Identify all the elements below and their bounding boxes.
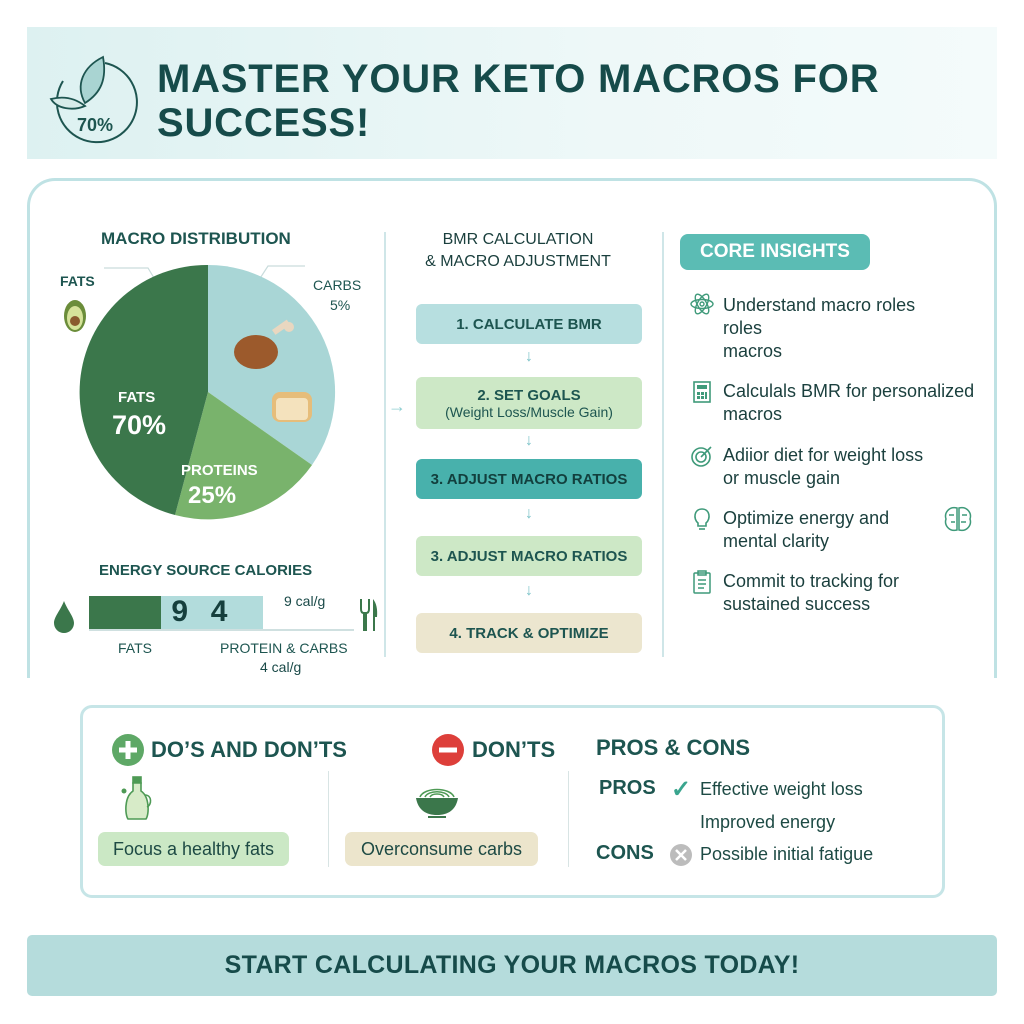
insight 5 — [723, 571, 899, 614]
step 3b: 3. ADJUST MACRO RATIOS — [431, 548, 627, 564]
insight 2: macros — [723, 404, 782, 424]
don'ts heading: DON’TS — [472, 737, 555, 762]
step 1: 1. CALCULATE BMR — [456, 316, 602, 332]
text: ↓ — [525, 505, 533, 522]
call to action banner: START CALCULATING YOUR MACROS TODAY! — [225, 951, 799, 979]
insight 2 — [723, 381, 974, 424]
step 2: (Weight Loss/Muscle Gain) — [445, 404, 613, 420]
do's heading: DO’S AND DON’TS — [151, 737, 347, 762]
icon: bulb — [694, 508, 710, 530]
insight 1: roles — [723, 318, 762, 338]
icon: leaf circle 70%: 70% — [77, 115, 113, 135]
heading — [425, 231, 611, 270]
pros & cons — [596, 735, 873, 866]
insight 3 — [723, 445, 923, 488]
icon: target — [691, 446, 712, 467]
bar chart: calories — [54, 593, 378, 675]
panel: BMR calculation — [425, 231, 611, 270]
column dividers — [384, 232, 386, 657]
pros & cons: ✓ — [671, 776, 691, 803]
title: SUCCESS! — [157, 101, 370, 145]
step 4: 4. TRACK & OPTIMIZE — [449, 624, 609, 642]
insight 2: Calculals BMR for personalized — [723, 381, 974, 401]
header banner — [27, 27, 997, 159]
insight 1 — [723, 295, 915, 361]
don't item: Overconsume carbs — [361, 838, 522, 858]
don'ts heading — [432, 734, 555, 766]
main panel — [27, 178, 997, 678]
insight 4: mental clarity — [723, 531, 829, 551]
insight 5: sustained success — [723, 594, 870, 614]
pie chart: CARBS — [313, 277, 361, 293]
text: ↓ — [525, 348, 533, 365]
insight 4: Optimize energy and — [723, 508, 889, 528]
icon: brain — [944, 506, 972, 532]
bar chart: calories: 9 cal/g — [284, 593, 325, 609]
panel: macro distribution — [54, 229, 378, 675]
icon: oil bottle — [122, 776, 152, 820]
pie chart: FATS — [118, 389, 155, 406]
step 2: 2. SET GOALS — [477, 386, 581, 404]
title: MASTER YOUR KETO MACROS FOR — [157, 57, 879, 101]
badge — [680, 234, 870, 270]
pros & cons: PROS & CONS — [596, 735, 750, 760]
text: ↓ — [525, 432, 533, 449]
icon: calculator — [693, 381, 711, 403]
step 2 — [416, 377, 642, 429]
pros & cons: Effective weight loss — [700, 779, 863, 799]
icon: atom — [690, 294, 714, 314]
arrow: into steps: → — [388, 396, 406, 416]
pie chart: FATS — [60, 273, 95, 289]
title — [157, 57, 879, 145]
insight 4 — [723, 508, 889, 551]
bar chart: calories: 9 4 — [171, 595, 229, 628]
pie chart: 25% — [188, 482, 236, 509]
heading: MACRO DISTRIBUTION — [101, 229, 291, 248]
icon: clipboard — [693, 570, 711, 594]
step 3: 3. ADJUST MACRO RATIOS — [431, 470, 627, 488]
heading: BMR CALCULATION — [443, 231, 593, 248]
pros & cons: Improved energy — [700, 812, 835, 832]
step 3b — [416, 536, 642, 576]
bar chart: calories: PROTEIN & CARBS — [220, 640, 348, 656]
pie chart: PROTEINS — [181, 462, 258, 479]
pros & cons: Possible initial fatigue — [700, 844, 873, 864]
do item — [98, 832, 289, 866]
step 3 — [416, 459, 642, 499]
bar chart: calories: FATS — [118, 640, 152, 656]
insight 3: or muscle gain — [723, 468, 840, 488]
do's heading — [112, 734, 347, 766]
icon: bowl — [416, 788, 458, 818]
don't item — [345, 832, 538, 866]
panel: do's and don'ts — [80, 705, 945, 898]
step 1 — [416, 304, 642, 344]
do item: Focus a healthy fats — [113, 838, 274, 858]
pie chart — [60, 265, 361, 520]
panel: macro distribution: 4 cal/g — [260, 659, 301, 675]
insight 1: Understand macro roles — [723, 295, 915, 315]
pie chart: 70% — [112, 410, 166, 440]
badge: CORE INSIGHTS — [700, 241, 850, 262]
step 4 — [416, 613, 642, 653]
pros & cons: CONS — [596, 842, 654, 864]
text: ↓ — [525, 582, 533, 599]
pros & cons: PROS — [599, 777, 656, 799]
insight 3: Adiior diet for weight loss — [723, 445, 923, 465]
insight 1: macros — [723, 341, 782, 361]
insight 5: Commit to tracking for — [723, 571, 899, 591]
heading: & MACRO ADJUSTMENT — [425, 253, 611, 270]
pie chart: 5% — [330, 297, 350, 313]
call to action banner — [27, 935, 997, 996]
heading: energy source calories: ENERGY SOURCE CALORIES — [99, 562, 312, 579]
icon: leaf circle 70% — [50, 56, 138, 144]
